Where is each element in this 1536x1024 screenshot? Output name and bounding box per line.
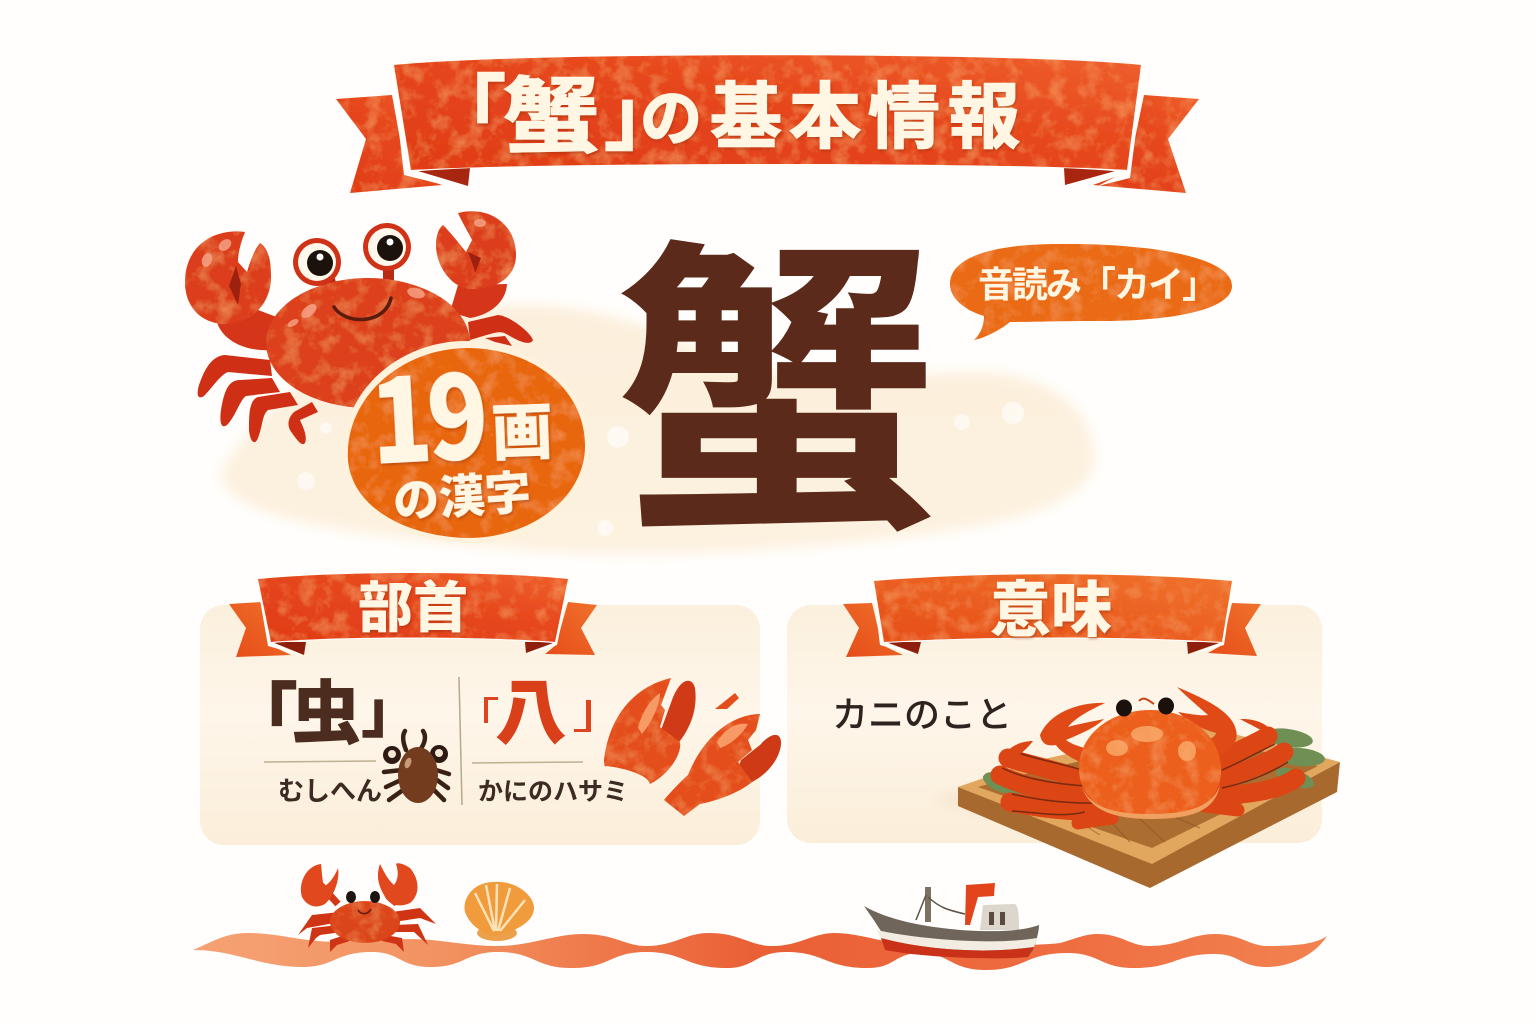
rule <box>264 761 376 762</box>
kanji strokes: 八 <box>495 654 567 759</box>
ribs <box>475 884 525 931</box>
unit 画: 画 <box>489 381 554 473</box>
panel: 部首 <box>200 563 781 845</box>
ribbon left fold <box>408 168 470 186</box>
crab eyes <box>1116 698 1174 716</box>
white edge <box>256 571 571 656</box>
icon: fishing boat <box>864 883 1039 958</box>
ribbon left tail <box>336 95 442 193</box>
heading: 意味 <box>990 560 1112 649</box>
badge outline <box>346 344 586 540</box>
band <box>874 574 1232 642</box>
smile <box>358 909 371 914</box>
ribbon right fold <box>1064 168 1126 185</box>
icon: shell <box>464 882 534 941</box>
chip <box>715 693 739 709</box>
crab left claw <box>185 231 271 324</box>
pincer two <box>664 714 760 816</box>
icon: cartoon crab <box>185 211 533 444</box>
crab legs <box>198 315 533 444</box>
left pincer <box>1040 703 1105 766</box>
panel: 意味 <box>787 560 1340 888</box>
ribbon: 部首 <box>229 563 597 657</box>
wave <box>193 933 1327 970</box>
reading: かにのハサミ <box>478 772 628 808</box>
legs <box>298 908 436 952</box>
crab eye stalks <box>320 266 394 292</box>
tail left <box>229 602 291 657</box>
pincer one highlight <box>638 693 660 734</box>
ribbon right tail <box>1093 95 1199 193</box>
crab smile <box>334 298 391 320</box>
right claw <box>378 863 418 905</box>
illustration: crab on plate <box>930 687 1340 888</box>
panel background <box>787 605 1322 843</box>
crab right claw seam <box>468 252 481 273</box>
right leg seams <box>1222 744 1288 788</box>
pincer one <box>604 678 680 784</box>
folds <box>272 642 556 655</box>
white edge <box>872 572 1234 655</box>
shell highlights <box>1106 726 1196 761</box>
wash bubbles <box>297 402 1024 536</box>
badge: 19画の漢字 <box>346 325 586 540</box>
icon: beetle <box>383 731 449 803</box>
band <box>258 573 568 642</box>
opening bracket: 「 <box>428 50 506 162</box>
white stripe <box>877 930 1037 950</box>
funnel <box>965 883 995 925</box>
title rest: 情 <box>868 58 940 163</box>
pincer two highlight <box>717 724 748 748</box>
legs and antennae <box>384 731 449 800</box>
plate top <box>958 725 1340 864</box>
crab left eye <box>293 238 341 286</box>
right leg tip <box>1240 719 1274 740</box>
shell fan <box>464 882 534 936</box>
rule <box>472 762 583 763</box>
crab left arm <box>217 310 290 350</box>
right radical: 八 <box>472 654 628 808</box>
closing bracket <box>574 700 591 732</box>
meaning text: カニのこと <box>832 686 1012 738</box>
opening bracket <box>484 697 498 723</box>
kanji: 虫 <box>291 658 361 759</box>
title rest: 本 <box>789 58 861 163</box>
closing bracket: 」 <box>361 663 421 750</box>
leaves <box>980 726 1326 798</box>
closing bracket: 」 <box>604 54 682 166</box>
cabin windows <box>989 912 1005 925</box>
crab shell <box>1079 710 1221 819</box>
title rest: 報 <box>948 58 1020 163</box>
left legs <box>1000 758 1112 823</box>
tail right <box>1208 603 1261 656</box>
left leg seams <box>1002 750 1098 815</box>
red stripe <box>881 938 1034 958</box>
pincer one inner finger <box>656 681 696 750</box>
speech bubble: 音読み <box>950 244 1232 340</box>
left radical: 虫 <box>226 658 421 808</box>
bubble text: 音読み「カイ」 <box>978 256 1218 308</box>
body <box>330 901 400 943</box>
crab body <box>266 278 470 408</box>
feeler <box>1139 699 1154 704</box>
stroke count: 19 <box>366 325 487 498</box>
ribbon main band <box>394 55 1141 170</box>
reading: むしへん <box>278 771 382 808</box>
title rest: 基 <box>710 58 782 163</box>
crab right eye <box>363 223 411 271</box>
badge fill <box>348 348 585 538</box>
tail right <box>545 602 597 655</box>
tail left <box>843 603 903 657</box>
hinge <box>477 925 517 941</box>
plate inner <box>978 735 1318 848</box>
divider <box>459 677 462 805</box>
watercolor background wash <box>221 305 1094 554</box>
plate grain <box>1060 800 1232 842</box>
crab right arm <box>450 284 507 318</box>
hull <box>864 906 1039 957</box>
icon: crab pincers <box>604 678 781 816</box>
eyes <box>383 745 448 764</box>
ribbon white edge <box>391 53 1145 186</box>
shell rim <box>1081 785 1220 819</box>
body <box>398 747 438 803</box>
pincer two inner finger <box>734 735 781 785</box>
の漢字: の漢字 <box>391 456 533 532</box>
right pincer <box>1177 687 1237 765</box>
eyes <box>346 891 380 903</box>
right legs <box>1205 736 1296 810</box>
ribbon: 意味 <box>843 560 1261 657</box>
title text <box>428 50 1020 169</box>
highlight <box>403 757 413 769</box>
title kanji: 蟹 <box>503 50 600 169</box>
icon: small crab <box>298 863 436 952</box>
main kanji 蟹: 蟹 <box>617 148 939 590</box>
mast <box>925 887 931 922</box>
rigging <box>916 895 965 920</box>
title ribbon <box>336 50 1199 193</box>
bubble shape <box>950 244 1232 340</box>
crab left claw seam <box>229 266 241 305</box>
cabin <box>980 904 1019 930</box>
left claw <box>301 864 338 906</box>
heading: 部首 <box>358 563 468 643</box>
plate side <box>958 762 1340 888</box>
shadow <box>930 740 1320 850</box>
crab right claw <box>436 211 516 289</box>
opening bracket: 「 <box>226 658 298 763</box>
title rest: の <box>640 68 702 158</box>
left leg tips <box>1004 741 1033 762</box>
folds <box>886 642 1222 654</box>
panel background <box>200 605 760 845</box>
crab body highlights <box>200 219 486 329</box>
arms <box>316 880 410 904</box>
